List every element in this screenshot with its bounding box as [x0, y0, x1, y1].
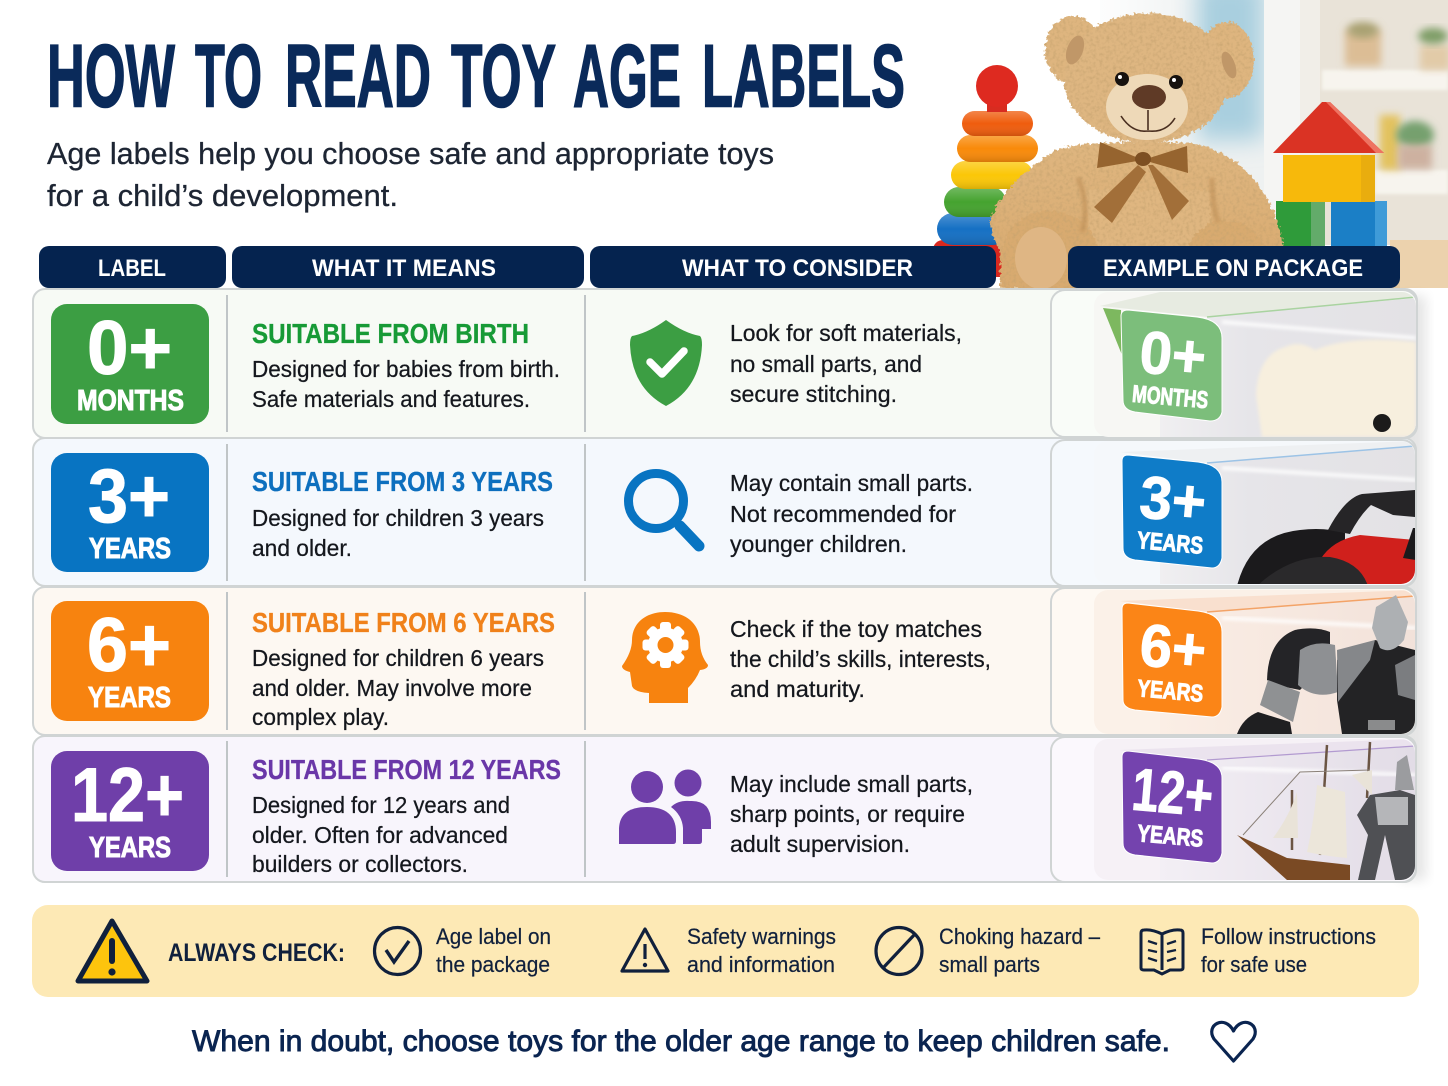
icon: prohibition sign	[876, 928, 922, 974]
meaning text: and older.	[252, 535, 352, 561]
badge: 6+ years: YEARS	[88, 682, 171, 714]
meaning text: SUITABLE FROM BIRTH	[252, 318, 529, 349]
meaning text: complex play.	[252, 704, 389, 730]
package example: 12+ box with ship and robot: 12+	[1129, 756, 1216, 829]
table header: what to consider	[590, 246, 996, 288]
meaning text	[252, 318, 560, 412]
check item: age label: the package	[436, 952, 550, 977]
row: 0+ months	[33, 289, 1417, 438]
badge: 0+ months: MONTHS	[77, 385, 184, 417]
consider text: the child’s skills, interests,	[730, 646, 991, 672]
meaning text: Designed for babies from birth.	[252, 356, 560, 382]
icon: head with gear	[622, 612, 708, 703]
consider text: no small parts, and	[730, 351, 922, 377]
table header: what it means	[232, 246, 584, 288]
meaning text	[252, 607, 555, 730]
table header: example on package	[1068, 246, 1400, 288]
consider text: adult supervision.	[730, 831, 910, 857]
consider text: and maturity.	[730, 676, 865, 702]
table header: example on package: EXAMPLE ON PACKAGE	[1103, 255, 1363, 282]
consider text	[730, 616, 991, 702]
footer message: When in doubt, choose toys for the older age range to keep children safe.	[192, 1025, 1170, 1058]
package example: 0+ box with plush bear: MONTHS	[1131, 381, 1209, 414]
meaning text: SUITABLE FROM 12 YEARS	[252, 754, 561, 785]
icon: two people	[619, 770, 711, 844]
meaning text: and older. May involve more	[252, 675, 532, 701]
table header: label	[39, 246, 226, 288]
package example: 0+ box with plush bear	[1051, 290, 1417, 437]
hero photo: nursery background with teddy bear and toys	[933, 0, 1448, 300]
consider text: May include small parts,	[730, 771, 973, 797]
subtitle: Age labels help you choose safe and appropriate toys	[47, 136, 774, 171]
always check panel	[32, 905, 1419, 997]
consider text	[730, 771, 973, 857]
badge: 0+ months	[51, 304, 209, 424]
badge: 0+ months: 0+	[87, 306, 172, 391]
check item: safety warnings	[687, 924, 836, 977]
icon: safety warning	[622, 929, 668, 971]
check item: safety warnings: and information	[687, 952, 835, 977]
meaning text: older. Often for advanced	[252, 822, 508, 848]
meaning text: Designed for children 6 years	[252, 645, 544, 671]
badge: 12+ years	[51, 751, 209, 871]
package example: 12+ box with ship and robot: YEARS	[1136, 820, 1204, 853]
teddy bear	[990, 13, 1285, 300]
consider text: sharp points, or require	[730, 801, 965, 827]
consider text: younger children.	[730, 531, 907, 557]
badge: 6+ years	[51, 601, 209, 721]
meaning text: Designed for children 3 years	[252, 505, 544, 531]
meaning text: SUITABLE FROM 6 YEARS	[252, 607, 555, 638]
meaning text	[252, 754, 561, 877]
icon: check circle	[374, 928, 420, 974]
check item: age label	[436, 924, 551, 977]
subtitle	[47, 136, 774, 213]
check item: follow instructions: for safe use	[1201, 952, 1307, 977]
title: AGE	[573, 26, 681, 126]
icon: shield with check	[630, 320, 702, 406]
consider text: May contain small parts.	[730, 470, 973, 496]
stacking ring toy	[933, 65, 1038, 277]
badge: 6+ years: 6+	[87, 603, 171, 688]
title: TO	[195, 26, 262, 126]
title: READ	[285, 26, 431, 126]
package example: 12+ box with ship and robot	[1051, 737, 1416, 882]
subtitle: for a child’s development.	[47, 178, 398, 213]
meaning text: Safe materials and features.	[252, 386, 530, 412]
check item: age label: Age label on	[436, 924, 551, 949]
always check label: ALWAYS CHECK:	[168, 939, 345, 967]
badge: 3+ years: 3+	[88, 454, 170, 539]
package example: 3+ box with toy car: YEARS	[1136, 527, 1204, 560]
row: 3+ years	[33, 438, 1416, 586]
package example: 3+ box with toy car: 3+	[1137, 463, 1209, 536]
title: HOW	[47, 26, 175, 126]
badge: 12+ years: 12+	[71, 753, 184, 838]
table header: what it means: WHAT IT MEANS	[312, 255, 496, 282]
package example: 6+ box with robot: YEARS	[1136, 675, 1204, 708]
meaning text: builders or collectors.	[252, 851, 468, 877]
consider text: Not recommended for	[730, 501, 956, 527]
icon: open book	[1141, 930, 1183, 974]
badge: 12+ years: YEARS	[89, 832, 171, 864]
meaning text	[252, 466, 553, 561]
package example: 0+ box with plush bear: 0+	[1137, 318, 1209, 391]
consider text	[730, 320, 962, 407]
meaning text: Designed for 12 years and	[252, 792, 510, 818]
row: 6+ years	[33, 587, 1416, 735]
icon: magnifying glass	[628, 474, 699, 546]
building blocks	[1273, 102, 1387, 247]
package example: 3+ box with toy car	[1051, 440, 1416, 586]
check item: follow instructions	[1201, 924, 1376, 977]
badge: 3+ years	[51, 453, 209, 572]
consider text: Look for soft materials,	[730, 320, 962, 346]
consider text: secure stitching.	[730, 381, 897, 407]
package example: 6+ box with robot: 6+	[1137, 611, 1209, 684]
blurred nursery background	[1000, 0, 1448, 288]
table header: label: LABEL	[98, 255, 166, 282]
check item: safety warnings: Safety warnings	[687, 924, 836, 949]
consider text	[730, 470, 973, 557]
meaning text: SUITABLE FROM 3 YEARS	[252, 466, 553, 497]
icon: heart	[1212, 1022, 1255, 1061]
package example: 6+ box with robot	[1051, 588, 1416, 735]
title: LABELS	[702, 26, 905, 126]
badge: 3+ years: YEARS	[89, 533, 171, 565]
check item: follow instructions: Follow instructions	[1201, 924, 1376, 949]
row: 12+ years	[33, 736, 1416, 882]
table header: what to consider: WHAT TO CONSIDER	[682, 255, 913, 282]
check item: choking hazard: small parts	[939, 952, 1040, 977]
check item: choking hazard	[939, 924, 1101, 977]
title	[47, 26, 905, 126]
icon: warning triangle	[78, 921, 147, 981]
title: TOY	[451, 26, 556, 126]
consider text: Check if the toy matches	[730, 616, 982, 642]
check item: choking hazard: Choking hazard –	[939, 924, 1101, 949]
